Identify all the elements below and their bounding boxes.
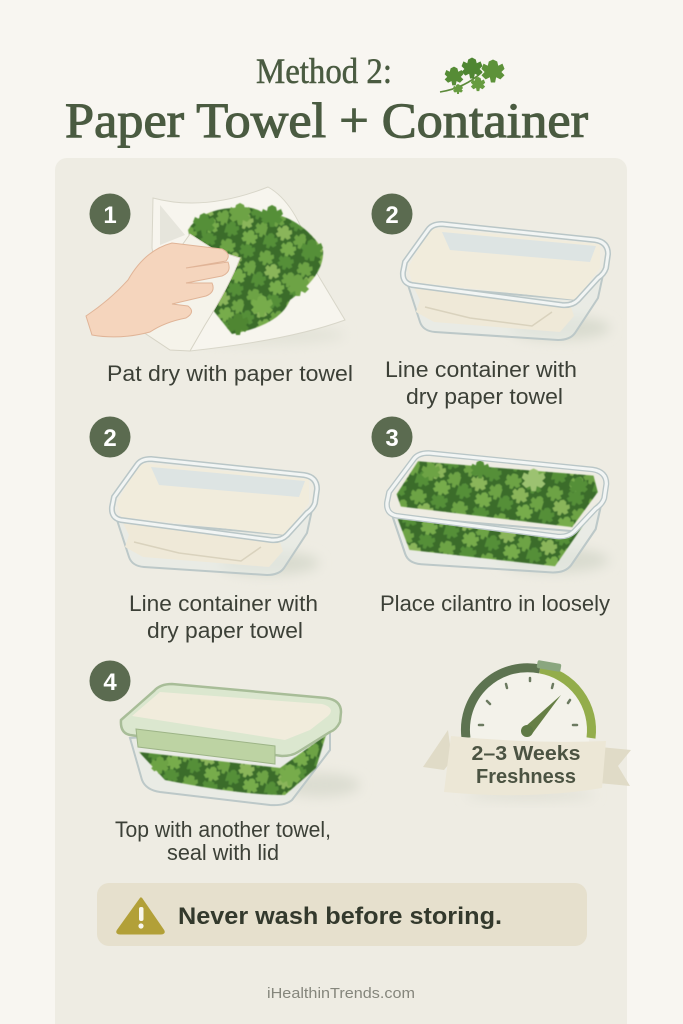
caption 4: seal with lid bbox=[167, 840, 279, 865]
warning text: Never wash before storing. bbox=[178, 903, 502, 930]
heading: method: Method 2: bbox=[256, 51, 392, 91]
badge 1: 1 bbox=[103, 202, 117, 229]
caption 3: Place cilantro in loosely bbox=[380, 591, 610, 616]
ribbon bbox=[423, 730, 631, 800]
badge 3 bbox=[372, 416, 412, 458]
caption 2 repeat: Line container with bbox=[129, 591, 318, 616]
badge 4: 4 bbox=[103, 669, 117, 696]
icon: stopwatch dial bbox=[465, 660, 592, 792]
ribbon: Freshness bbox=[476, 766, 576, 788]
badge 2 repeat: 2 bbox=[103, 425, 117, 452]
icon: warning triangle bbox=[118, 899, 163, 933]
caption 4 bbox=[115, 817, 331, 865]
caption 2 repeat: dry paper towel bbox=[147, 618, 303, 643]
timer badge: freshness bbox=[423, 660, 631, 800]
step 1 bbox=[86, 187, 353, 386]
warning banner bbox=[97, 883, 587, 946]
footer: website: iHealthinTrends.com bbox=[267, 985, 415, 1002]
step 2 left bbox=[90, 416, 319, 643]
badge 2 repeat bbox=[90, 416, 130, 458]
step 2 right bbox=[372, 194, 610, 409]
badge 3: 3 bbox=[385, 425, 399, 452]
badge 2 bbox=[372, 194, 412, 234]
illustration: sealed container with towel and lid bbox=[121, 684, 360, 805]
illustration: hand patting cilantro with paper towel bbox=[86, 187, 345, 351]
badge 1 bbox=[90, 194, 130, 234]
icon: cilantro sprig bbox=[440, 58, 505, 94]
illustration: container lined with towel bbox=[403, 224, 610, 340]
step 4 bbox=[90, 660, 360, 865]
step 3 bbox=[372, 416, 610, 616]
caption 2: Line container with bbox=[385, 357, 577, 382]
caption 2: dry paper towel bbox=[406, 384, 563, 409]
illustration: container with loose cilantro bbox=[387, 453, 608, 572]
illustration: container lined with towel repeat bbox=[112, 459, 319, 575]
caption 2 bbox=[385, 357, 577, 409]
caption 4: Top with another towel, bbox=[115, 817, 331, 842]
panel: steps bbox=[55, 158, 627, 1024]
caption 2 repeat bbox=[129, 591, 318, 643]
badge 2: 2 bbox=[385, 202, 399, 229]
badge 4 bbox=[90, 660, 130, 702]
ribbon: 2–3 Weeks bbox=[472, 743, 580, 765]
heading: paper towel + container: Paper Towel + Container bbox=[65, 92, 588, 148]
title bbox=[65, 51, 588, 148]
caption 1: Pat dry with paper towel bbox=[107, 361, 353, 386]
